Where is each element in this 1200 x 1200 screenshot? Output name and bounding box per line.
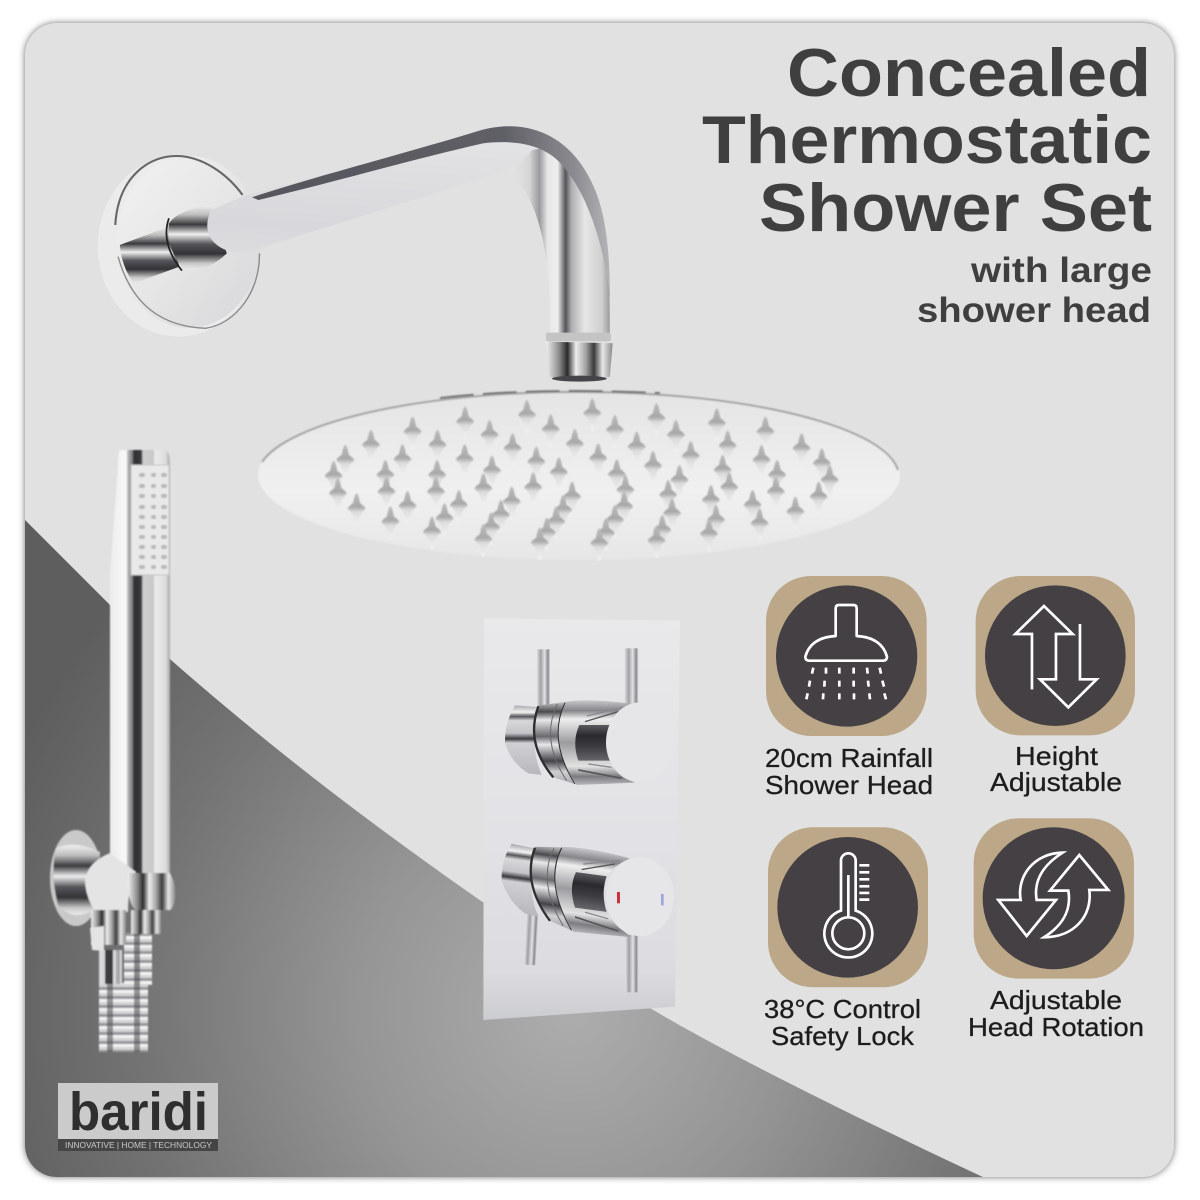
label: height adjustable: Adjustable [990,767,1122,797]
icon badge: rotation arrows [974,818,1134,979]
title [702,35,1152,246]
icon badge: height adjustable arrows [976,576,1135,735]
product: thermostatic valve plate [483,618,680,1020]
label: height adjustable: Height [1015,741,1099,771]
subtitle: shower head [917,291,1151,330]
icon badge: thermometer [768,827,928,987]
label: rainfall shower head: Shower Head [765,770,933,800]
top right lever [624,648,638,708]
subtitle: with large [970,251,1152,290]
lower left lever [524,913,538,965]
title: Thermostatic [702,102,1152,178]
label: head rotation: Adjustable [990,985,1122,1015]
label: head rotation [968,985,1144,1042]
icon badge: shower head [766,576,927,736]
logo: baridi: baridi [69,1082,208,1142]
product: hand shower with holder and hose [50,450,175,1052]
product: round rainfall shower head [258,390,900,561]
product: wall mounted shower arm [98,126,613,382]
title: Concealed [787,35,1151,111]
subtitle [917,251,1152,330]
lower knob [502,837,674,940]
top left lever [537,649,550,709]
label: temperature control [764,994,921,1051]
label: temperature control: 38°C Control [764,994,921,1024]
label: height adjustable [990,741,1122,797]
label: rainfall shower head: 20cm Rainfall [765,743,933,773]
title: Shower Set [759,170,1152,246]
label: temperature control: Safety Lock [771,1021,915,1051]
label: head rotation: Head Rotation [968,1012,1144,1042]
logo: baridi: INNOVATIVE | HOME | TECHNOLOGY [65,1140,212,1150]
label: rainfall shower head [765,743,933,800]
lower right lever [625,935,638,992]
upper knob [505,700,674,785]
